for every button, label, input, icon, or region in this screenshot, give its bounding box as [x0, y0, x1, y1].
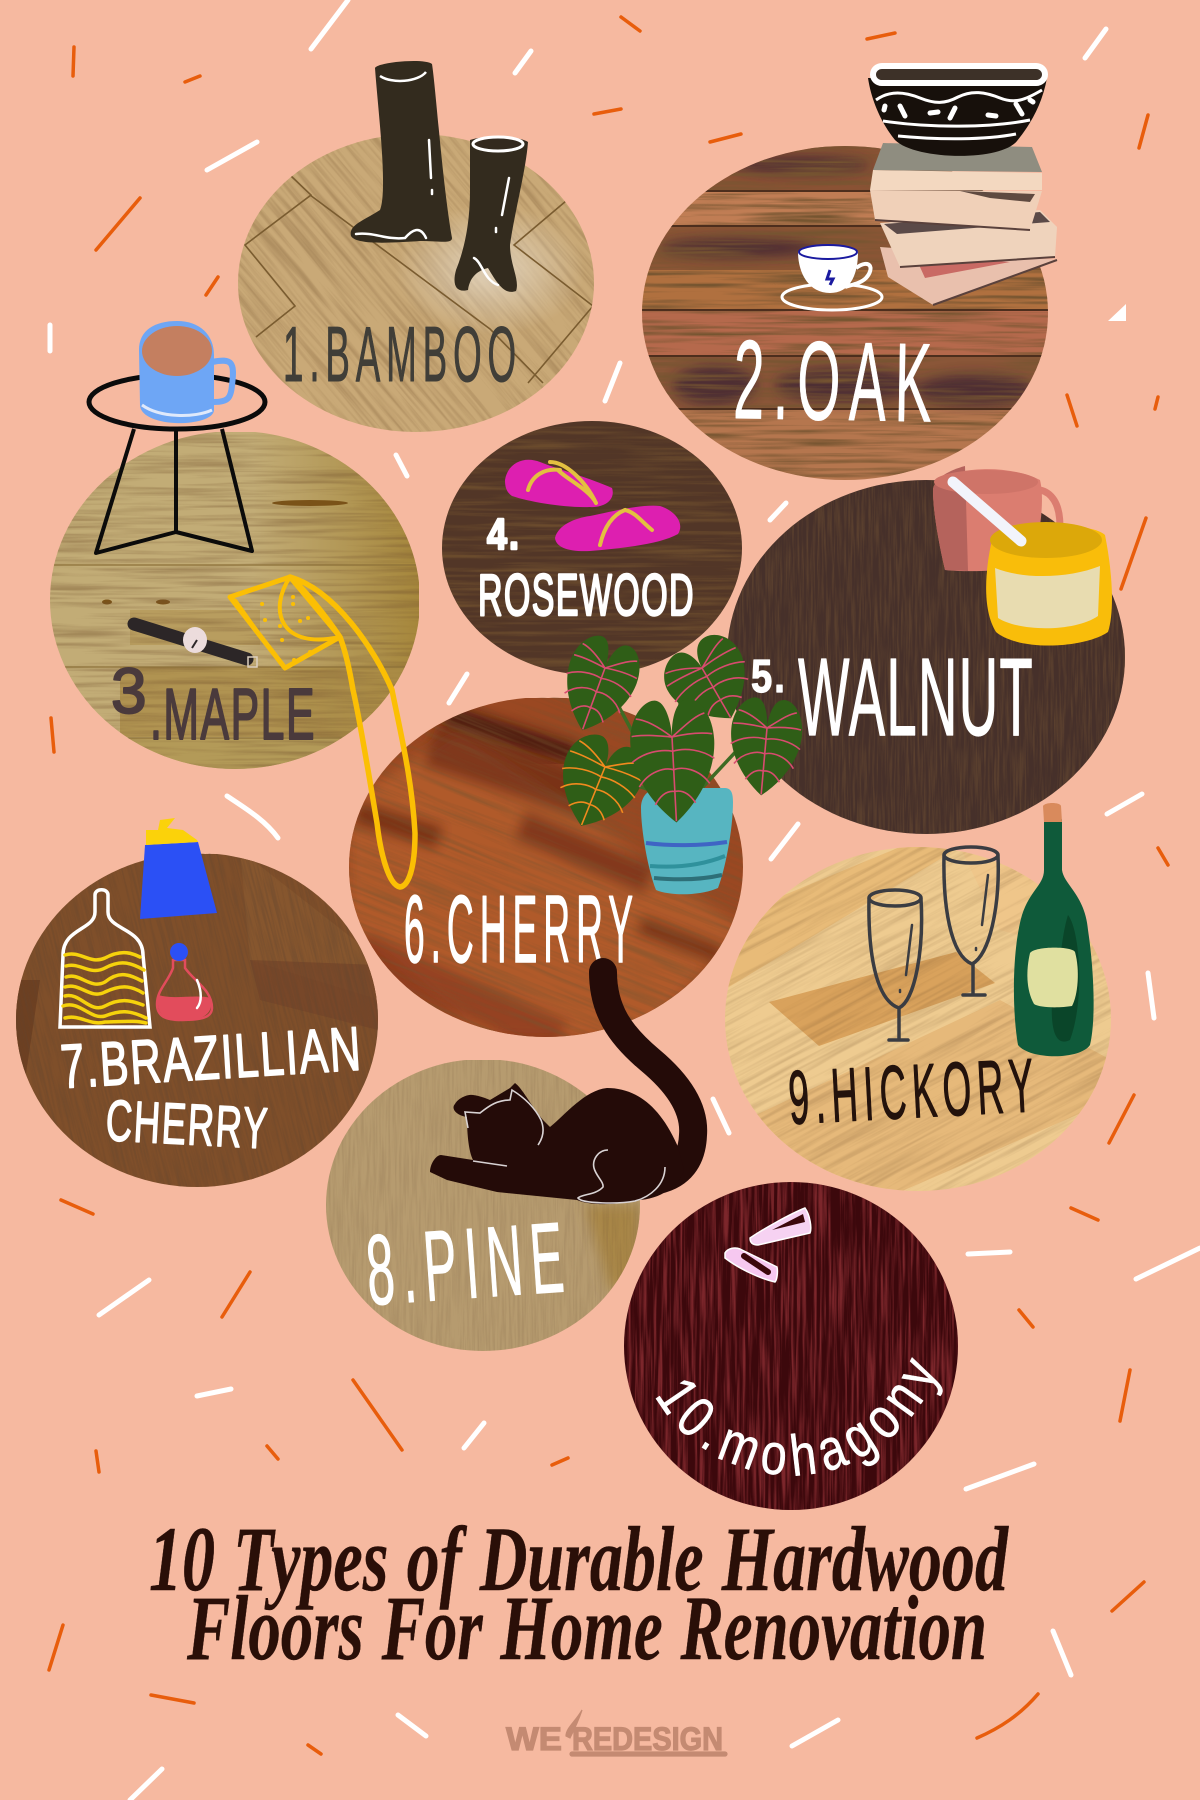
icon: magenta flip flops: [505, 460, 680, 551]
icon: side table with stool legs: [89, 375, 265, 553]
icon: tall black boots: [351, 61, 528, 292]
icon: blue tube: [140, 818, 217, 919]
icon: yellow jar with knife: [953, 482, 1112, 646]
label: 4. rosewood: 4.: [487, 510, 521, 559]
label: 4. rosewood: [478, 510, 695, 628]
mahogany floor disc: [624, 1182, 959, 1510]
label: 7. brazillian cherry: [59, 1015, 364, 1162]
maple floor disc: [50, 432, 420, 769]
label: 7. brazillian cherry: 7.BRAZILLIAN: [59, 1015, 364, 1102]
label: 8. pine: 8.PINE: [363, 1201, 575, 1327]
bamboo floor disc: [238, 135, 594, 432]
leaf pink veins top left: [549, 629, 648, 742]
icon: patterned bowl: [868, 66, 1047, 156]
cherry floor disc: [349, 697, 743, 1037]
icon: blue mug: [139, 321, 233, 423]
rosewood floor disc: [442, 421, 742, 675]
label: 3. maple: .MAPLE: [150, 675, 316, 755]
icon: green wine bottle: [1014, 803, 1094, 1056]
title: [149, 1508, 1009, 1679]
icon: yellow scarf: [230, 577, 415, 887]
leaf orange veins left: [544, 726, 652, 841]
panel: 2 oak: 2.OAK: [733, 317, 942, 446]
panel: 6 cherry: [349, 697, 743, 1037]
label: 5. walnut: [751, 636, 1034, 759]
brazilian cherry floor disc: [16, 853, 378, 1187]
panel: 7 brazilian cherry: [16, 818, 378, 1187]
icon: potted plant: [544, 626, 805, 894]
label: 7. brazillian cherry: CHERRY: [104, 1088, 270, 1162]
icon: teacup and saucer: [782, 245, 882, 310]
panel: 9 hickory: [725, 803, 1111, 1191]
icon: black cat: [430, 972, 693, 1204]
panel: 1 bamboo: [238, 61, 594, 432]
label: 3. maple: 3: [111, 655, 149, 727]
label: 5. walnut: 5.: [751, 650, 787, 702]
leaf pink veins top right: [654, 626, 766, 739]
panel: 3 maple: [50, 432, 420, 769]
panel: 4 rosewood: [442, 421, 742, 675]
icon: champagne glasses: [869, 847, 998, 1040]
oak floor disc: [642, 146, 1048, 480]
icon: pink white slippers: [725, 1208, 811, 1282]
leaf pink veins right: [726, 696, 805, 798]
label: 4. rosewood: ROSEWOOD: [478, 563, 695, 628]
icon: wristwatch: [134, 624, 257, 667]
panel: 10 mahogany: [624, 1182, 958, 1510]
icon: pink mug: [933, 466, 1060, 571]
logo: We Redesign: [506, 1710, 727, 1757]
icon: red perfume bottle: [157, 943, 212, 1020]
label: 10. mohagony: 10.mohagony: [656, 1357, 943, 1476]
panel: 1 bamboo: 1.BAMBOO: [283, 310, 522, 398]
logo: We Redesign: REDESIGN: [572, 1721, 723, 1757]
label: 3. maple: [111, 655, 316, 755]
hickory floor disc: [725, 847, 1111, 1191]
pot: [641, 788, 733, 894]
leaf pink veins centre: [628, 698, 718, 825]
logo: We Redesign: WE: [506, 1721, 562, 1757]
panel: 5 walnut: [727, 466, 1125, 834]
panel: 2 oak: [642, 66, 1057, 480]
icon: stack of books: [870, 143, 1057, 305]
walnut floor disc: [727, 480, 1125, 834]
panel: 6 cherry: 6.CHERRY: [404, 876, 639, 983]
icon: cutting board with waves: [60, 890, 150, 1027]
pine floor disc: [326, 1060, 640, 1351]
panel: 8 pine: [326, 1060, 640, 1351]
